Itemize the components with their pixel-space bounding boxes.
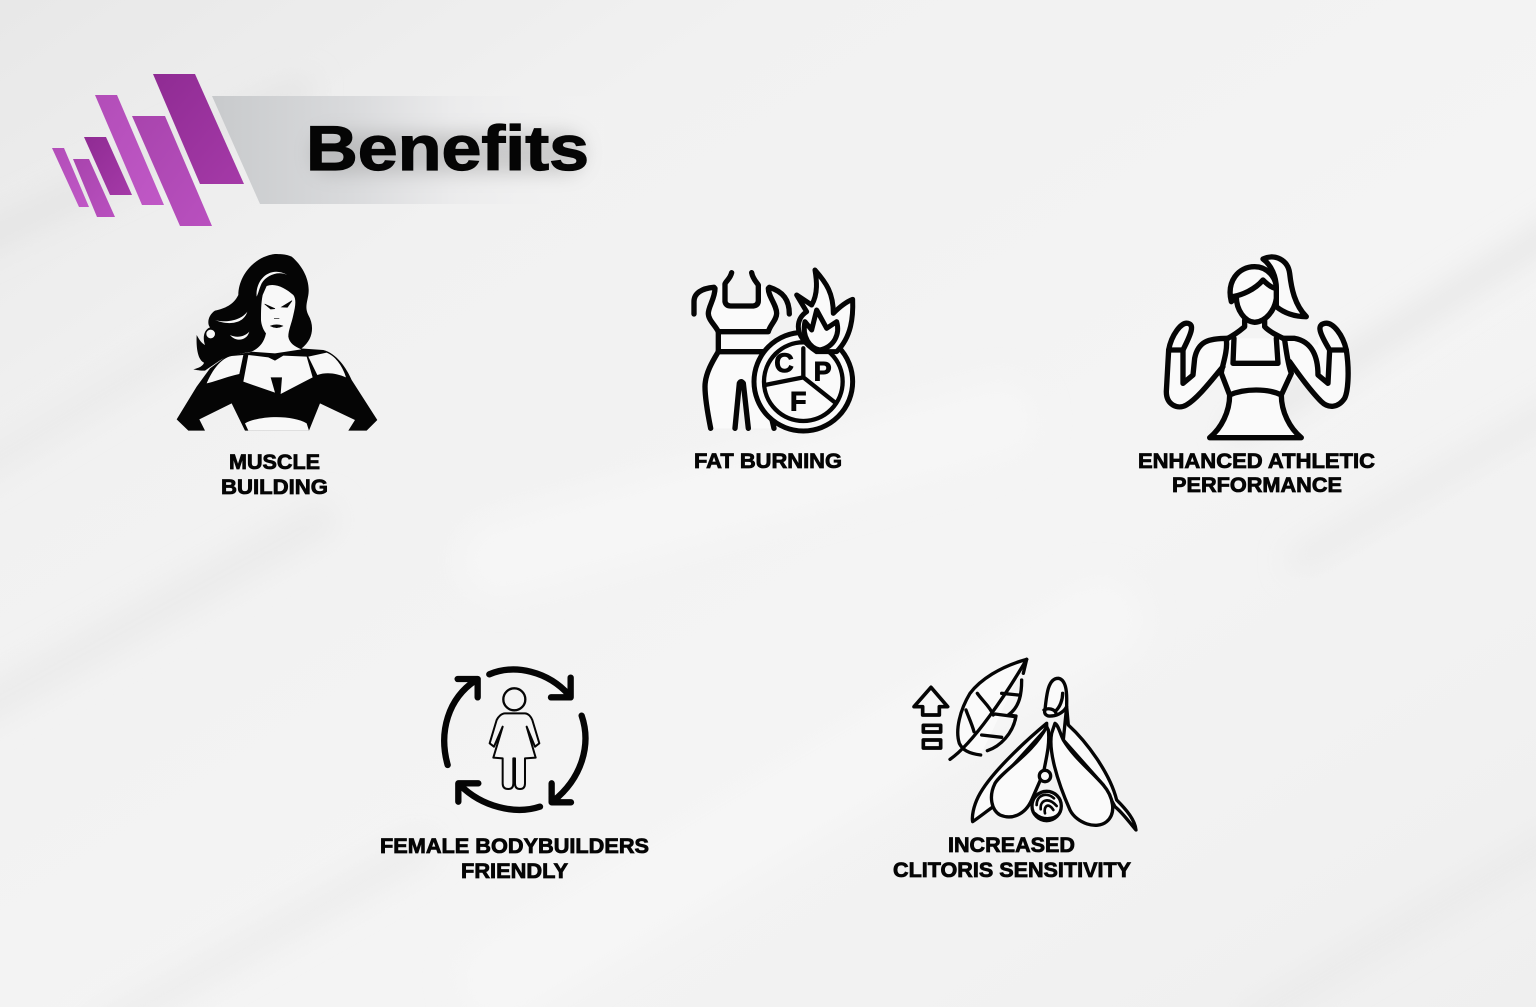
label: increased clitoris sensitivity: INCREASED xyxy=(948,834,1075,857)
macro wheel xyxy=(754,332,853,431)
head and ponytail xyxy=(1226,257,1306,339)
title: Benefits xyxy=(306,114,589,184)
silhouette fill xyxy=(1166,323,1348,438)
cycle arrows xyxy=(444,670,585,810)
up arrow with bars xyxy=(914,687,948,748)
tank top xyxy=(1210,338,1301,438)
label: muscle building: BUILDING xyxy=(221,476,328,499)
label: muscle building: MUSCLE xyxy=(229,451,320,474)
neck and face xyxy=(252,285,301,353)
logo bars xyxy=(52,74,244,226)
icon: muscular woman xyxy=(177,254,377,431)
label: increased clitoris sensitivity: CLITORIS SENSITIVITY xyxy=(893,859,1131,882)
hair xyxy=(193,254,312,371)
letter F: F xyxy=(790,387,806,417)
letter C: C xyxy=(774,348,794,378)
body silhouette xyxy=(177,348,377,431)
label: enhanced athletic performance: PERFORMANCE xyxy=(1172,474,1342,497)
letter P: P xyxy=(814,357,832,387)
hair highlights xyxy=(215,272,287,340)
label: female bodybuilders friendly: FEMALE BODYBUILDERS xyxy=(380,835,649,858)
label: female bodybuilders friendly: FRIENDLY xyxy=(461,860,568,883)
label: increased clitoris sensitivity xyxy=(893,834,1131,882)
heading shadow xyxy=(312,132,584,174)
face features xyxy=(265,301,292,328)
label: female bodybuilders friendly xyxy=(380,835,649,883)
arms xyxy=(1166,323,1348,407)
icon: athletic woman xyxy=(1166,257,1348,438)
icon: cycle with female figure xyxy=(444,670,585,810)
flame xyxy=(797,270,853,352)
header banner xyxy=(212,96,610,204)
shoulders and chest xyxy=(206,330,346,431)
label: muscle building xyxy=(221,451,328,499)
icon: leaf, arrow and anatomical line drawing xyxy=(914,659,1136,830)
label: enhanced athletic performance xyxy=(1138,450,1375,497)
label: fat burning: FAT BURNING xyxy=(694,450,842,473)
torso xyxy=(694,273,789,428)
icon: fat burning xyxy=(694,270,853,431)
banner ribbon xyxy=(212,96,610,204)
leaf xyxy=(950,659,1027,759)
female figure xyxy=(490,688,539,789)
label: enhanced athletic performance: ENHANCED ATHLETIC xyxy=(1138,450,1375,473)
anatomical outline xyxy=(972,678,1136,830)
